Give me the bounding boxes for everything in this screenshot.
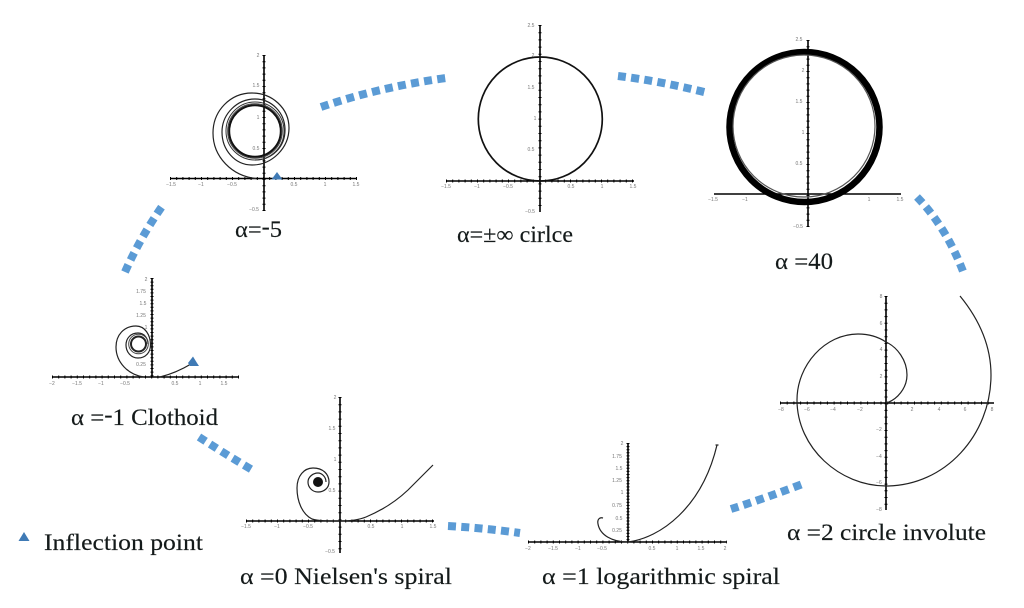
axes: 0.5: [528, 147, 535, 153]
axes: −1.5: [241, 524, 251, 530]
curve: circle: [478, 57, 602, 181]
axes: 1.25: [612, 478, 622, 484]
axes: 4: [880, 347, 883, 353]
axes: [166, 53, 360, 213]
axes: −2: [857, 407, 863, 413]
panel: logarithmic spiral plot: [525, 441, 727, 552]
axes: 0.5: [291, 182, 298, 188]
axes: 2: [724, 546, 727, 552]
axes: −1: [742, 197, 748, 203]
axes: 1: [676, 546, 679, 552]
axes: −2: [49, 381, 55, 387]
axes: 1.75: [136, 289, 146, 295]
axes: −0.5: [525, 209, 535, 215]
axes: 2: [621, 441, 624, 447]
label: alpha -5: -: [262, 214, 270, 239]
axes: 1.5: [430, 524, 437, 530]
label: inflection point: Inflection point: [44, 530, 204, 555]
axes: 0.5: [329, 488, 336, 494]
axes: 0.25: [136, 362, 146, 368]
axes: [778, 294, 994, 513]
axes: 1.5: [253, 83, 260, 89]
label: Nielsen spiral: α =0 Nielsen's spiral: [240, 564, 452, 589]
arrow: dashed arc from alpha -5 to circle: [321, 78, 446, 107]
axes: 0.5: [796, 161, 803, 167]
axes: −1.5: [441, 184, 451, 190]
arrow: dashed arc from logarithmic to Nielsen: [448, 526, 520, 533]
curve: near-circle band: [730, 52, 880, 202]
axes: 1.5: [698, 546, 705, 552]
axes: 0.5: [616, 516, 623, 522]
axes: 1.5: [329, 426, 336, 432]
axes: 1.5: [140, 301, 147, 307]
axes: 1: [334, 457, 337, 463]
icon: inflection point marker: [188, 356, 199, 366]
axes: [241, 395, 437, 555]
icon: legend triangle: [18, 532, 30, 541]
axes: 1.5: [528, 85, 535, 91]
axes: 2.5: [528, 23, 535, 29]
axes: −4: [830, 407, 836, 413]
axes: −1: [575, 546, 581, 552]
curve: clothoid spiral: [116, 326, 191, 377]
axes: −1: [474, 184, 480, 190]
axes: [525, 441, 727, 552]
axes: −1.5: [708, 197, 718, 203]
panel: circle plot: [441, 23, 637, 215]
axes: 1.25: [136, 313, 146, 319]
axes: 1.75: [612, 454, 622, 460]
panel: circle involute plot: [778, 294, 994, 513]
axes: −0.5: [120, 381, 130, 387]
curve: involute: [797, 296, 991, 486]
label: alpha -5: α=: [235, 217, 260, 242]
axes: −1: [198, 182, 204, 188]
axes: 1: [534, 116, 537, 122]
axes: 6: [880, 321, 883, 327]
arrow: dashed arc from involute to logarithmic: [731, 483, 805, 509]
axes: −1: [98, 381, 104, 387]
axes: 2: [880, 374, 883, 380]
axes: −2: [525, 546, 531, 552]
curve: spiral: [213, 93, 289, 178]
axes: −0.5: [325, 549, 335, 555]
axes: 2: [911, 407, 914, 413]
arrow: dashed arc from circle to alpha 40: [618, 76, 708, 93]
axes: 1: [145, 325, 148, 331]
axes: [441, 23, 637, 215]
arrow: dashed arc from alpha 40 to involute: [917, 197, 964, 274]
panel: alpha 40 plot: [708, 37, 904, 230]
axes: −8: [876, 507, 882, 513]
label: alpha 40: α =40: [775, 249, 833, 274]
axes: 0.75: [612, 503, 622, 509]
axes: 2: [802, 68, 805, 74]
axes: 8: [991, 407, 994, 413]
axes: 0.25: [612, 528, 622, 534]
axes: 2: [145, 277, 148, 283]
label: alpha -5: 5: [270, 217, 282, 242]
label: circle involute: α =2 circle involute: [787, 520, 986, 545]
arrow: dashed arc from clothoid to alpha -5: [125, 205, 163, 272]
label: logarithmic spiral: α =1 logarithmic spiral: [542, 564, 780, 589]
axes: −6: [876, 480, 882, 486]
axes: −0.5: [227, 182, 237, 188]
axes: 1: [324, 182, 327, 188]
curve: Nielsen spiral: [297, 465, 433, 521]
axes: 1: [868, 197, 871, 203]
axes: 1.5: [353, 182, 360, 188]
axes: −2: [876, 427, 882, 433]
axes: −6: [804, 407, 810, 413]
curve: logarithmic spiral: [598, 445, 718, 542]
axes: 0.5: [172, 381, 179, 387]
axes: 2: [257, 53, 260, 59]
legend: inflection point: [18, 530, 204, 555]
axes: −0.5: [303, 524, 313, 530]
axes: 1.5: [221, 381, 228, 387]
axes: 1: [621, 490, 624, 496]
axes: −4: [876, 454, 882, 460]
arrow: dashed arc from Nielsen to clothoid: [199, 437, 254, 471]
label: clothoid: α =: [71, 405, 102, 430]
axes: 1.5: [630, 184, 637, 190]
axes: 1: [199, 381, 202, 387]
panel: Nielsen spiral plot: [241, 395, 437, 555]
axes: 0.5: [253, 146, 260, 152]
axes: 1: [601, 184, 604, 190]
axes: 1.5: [897, 197, 904, 203]
axes: −1.5: [166, 182, 176, 188]
axes: 0.5: [568, 184, 575, 190]
label: clothoid: 1 Clothoid: [112, 405, 219, 430]
axes: −0.5: [249, 207, 259, 213]
axes: 2.5: [796, 37, 803, 43]
axes: 1: [257, 115, 260, 121]
axes: 2: [532, 53, 535, 59]
axes: [49, 277, 239, 387]
axes: 1: [401, 524, 404, 530]
panel: clothoid plot: [49, 277, 239, 387]
axes: −8: [778, 407, 784, 413]
axes: −1.5: [72, 381, 82, 387]
axes: 1: [802, 130, 805, 136]
axes: 0.5: [649, 546, 656, 552]
axes: 2: [334, 395, 337, 401]
axes: 1.5: [616, 466, 623, 472]
axes: 1.5: [796, 99, 803, 105]
axes: 8: [880, 294, 883, 300]
axes: −1.5: [548, 546, 558, 552]
icon: inflection point marker: [272, 172, 282, 180]
axes: −0.5: [503, 184, 513, 190]
label: alpha infinity: α=±∞ cirlce: [457, 222, 573, 247]
axes: −1: [274, 524, 280, 530]
axes: −0.5: [597, 546, 607, 552]
axes: [708, 37, 904, 230]
axes: 0.5: [368, 524, 375, 530]
axes: −0.5: [793, 224, 803, 230]
label: clothoid: -: [104, 402, 112, 427]
axes: 6: [964, 407, 967, 413]
panel: alpha -5 plot: [166, 53, 360, 213]
axes: 4: [938, 407, 941, 413]
